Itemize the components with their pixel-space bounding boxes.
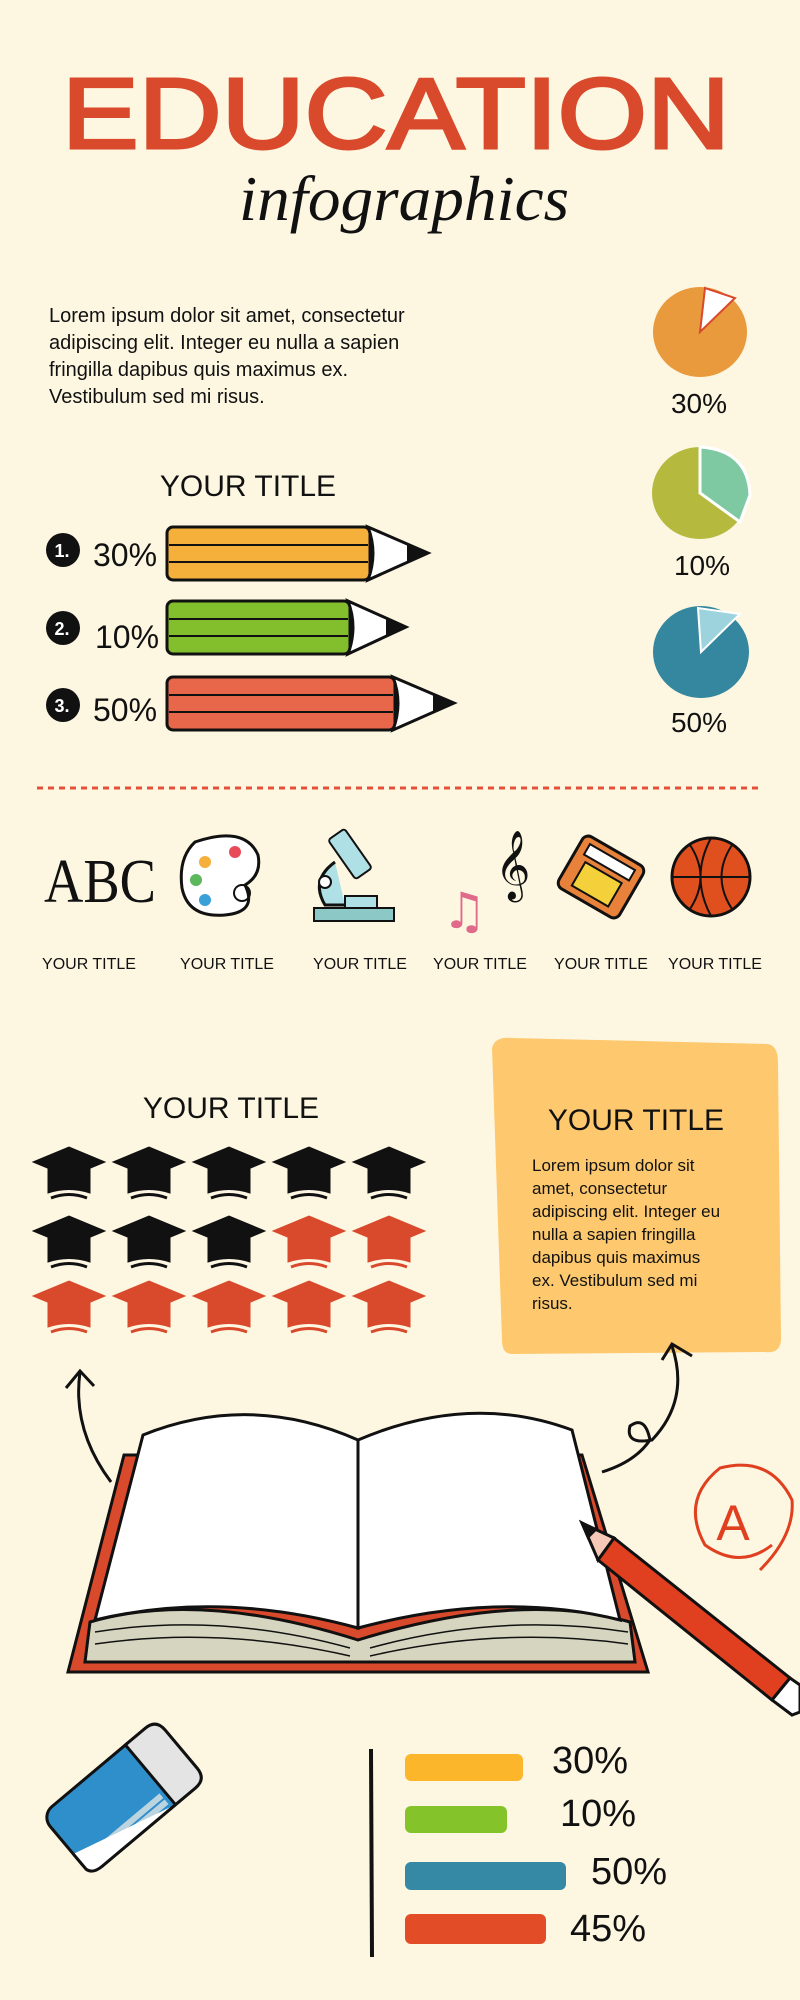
bar chart: 30% <box>552 1740 628 1782</box>
pencil bar 1: 30% <box>93 537 157 573</box>
icon labels: YOUR TITLE <box>313 956 407 973</box>
axis line <box>371 1749 372 1957</box>
pencil bar 3: 50% <box>93 692 157 728</box>
arrow: left <box>66 1371 111 1482</box>
intro text: adipiscing elit. Integer eu nulla a sapien <box>49 332 399 354</box>
callout box: YOUR TITLE <box>548 1104 724 1137</box>
icon labels: YOUR TITLE <box>433 956 527 973</box>
pencil bar 3 <box>46 677 454 730</box>
subtitle: infographics <box>239 163 569 234</box>
pie chart 3: 50% <box>671 707 727 738</box>
icon: music notes: ♫ <box>442 882 487 940</box>
arrow: right <box>602 1344 692 1472</box>
callout box: ex. Vestibulum sed mi <box>532 1271 697 1290</box>
pie chart 2 <box>652 447 750 581</box>
icon: ABC: ABC <box>44 848 156 916</box>
icon: music notes <box>442 830 530 940</box>
pie chart 1: 30% <box>671 388 727 419</box>
pencil bar 2: 10% <box>95 619 159 655</box>
callout box: risus. <box>532 1294 573 1313</box>
icon: microscope <box>314 829 394 921</box>
icon: palette <box>181 836 259 915</box>
icon labels: YOUR TITLE <box>42 956 136 973</box>
grade A mark: A <box>716 1495 750 1551</box>
icon labels: YOUR TITLE <box>554 956 648 973</box>
callout box: nulla a sapien fringilla <box>532 1225 696 1244</box>
callout box: Lorem ipsum dolor sit <box>532 1156 695 1175</box>
bar chart: 45% <box>570 1908 646 1950</box>
icon labels <box>42 956 762 973</box>
callout box <box>492 1038 781 1354</box>
pencil bar 3: 3. <box>54 696 70 716</box>
icon: basketball <box>672 838 750 916</box>
pencil bar 2 <box>46 601 406 655</box>
bar chart: 50% <box>591 1851 667 1893</box>
callout box: adipiscing elit. Integer eu <box>532 1202 720 1221</box>
callout box: dapibus quis maximus <box>532 1248 700 1267</box>
pie chart 1 <box>653 287 747 419</box>
eraser <box>41 1719 215 1886</box>
pencil bar 1 <box>46 527 428 580</box>
icon labels: YOUR TITLE <box>668 956 762 973</box>
bar chart: 10% <box>560 1793 636 1835</box>
icon: music notes: 𝄞 <box>495 830 530 902</box>
pencil bar 2: 2. <box>54 619 70 639</box>
icon labels: YOUR TITLE <box>180 956 274 973</box>
title: EDUCATION <box>62 58 730 170</box>
callout box: amet, consectetur <box>532 1179 667 1198</box>
graduation caps grid <box>33 1147 425 1332</box>
icon: calculator <box>556 834 646 920</box>
intro text: Vestibulum sed mi risus. <box>49 386 265 408</box>
bar chart <box>405 1740 667 1950</box>
pie chart 2: 10% <box>674 550 730 581</box>
caps title: YOUR TITLE <box>143 1092 319 1125</box>
intro text <box>49 305 405 408</box>
pencil chart title: YOUR TITLE <box>160 470 336 503</box>
intro text: fringilla dapibus quis maximus ex. <box>49 359 348 381</box>
pie chart 3 <box>653 606 749 738</box>
intro text: Lorem ipsum dolor sit amet, consectetur <box>49 305 405 327</box>
grade A mark <box>695 1465 792 1570</box>
book <box>68 1413 648 1672</box>
pencil <box>582 1523 800 1715</box>
pencil bar 1: 1. <box>54 541 70 561</box>
